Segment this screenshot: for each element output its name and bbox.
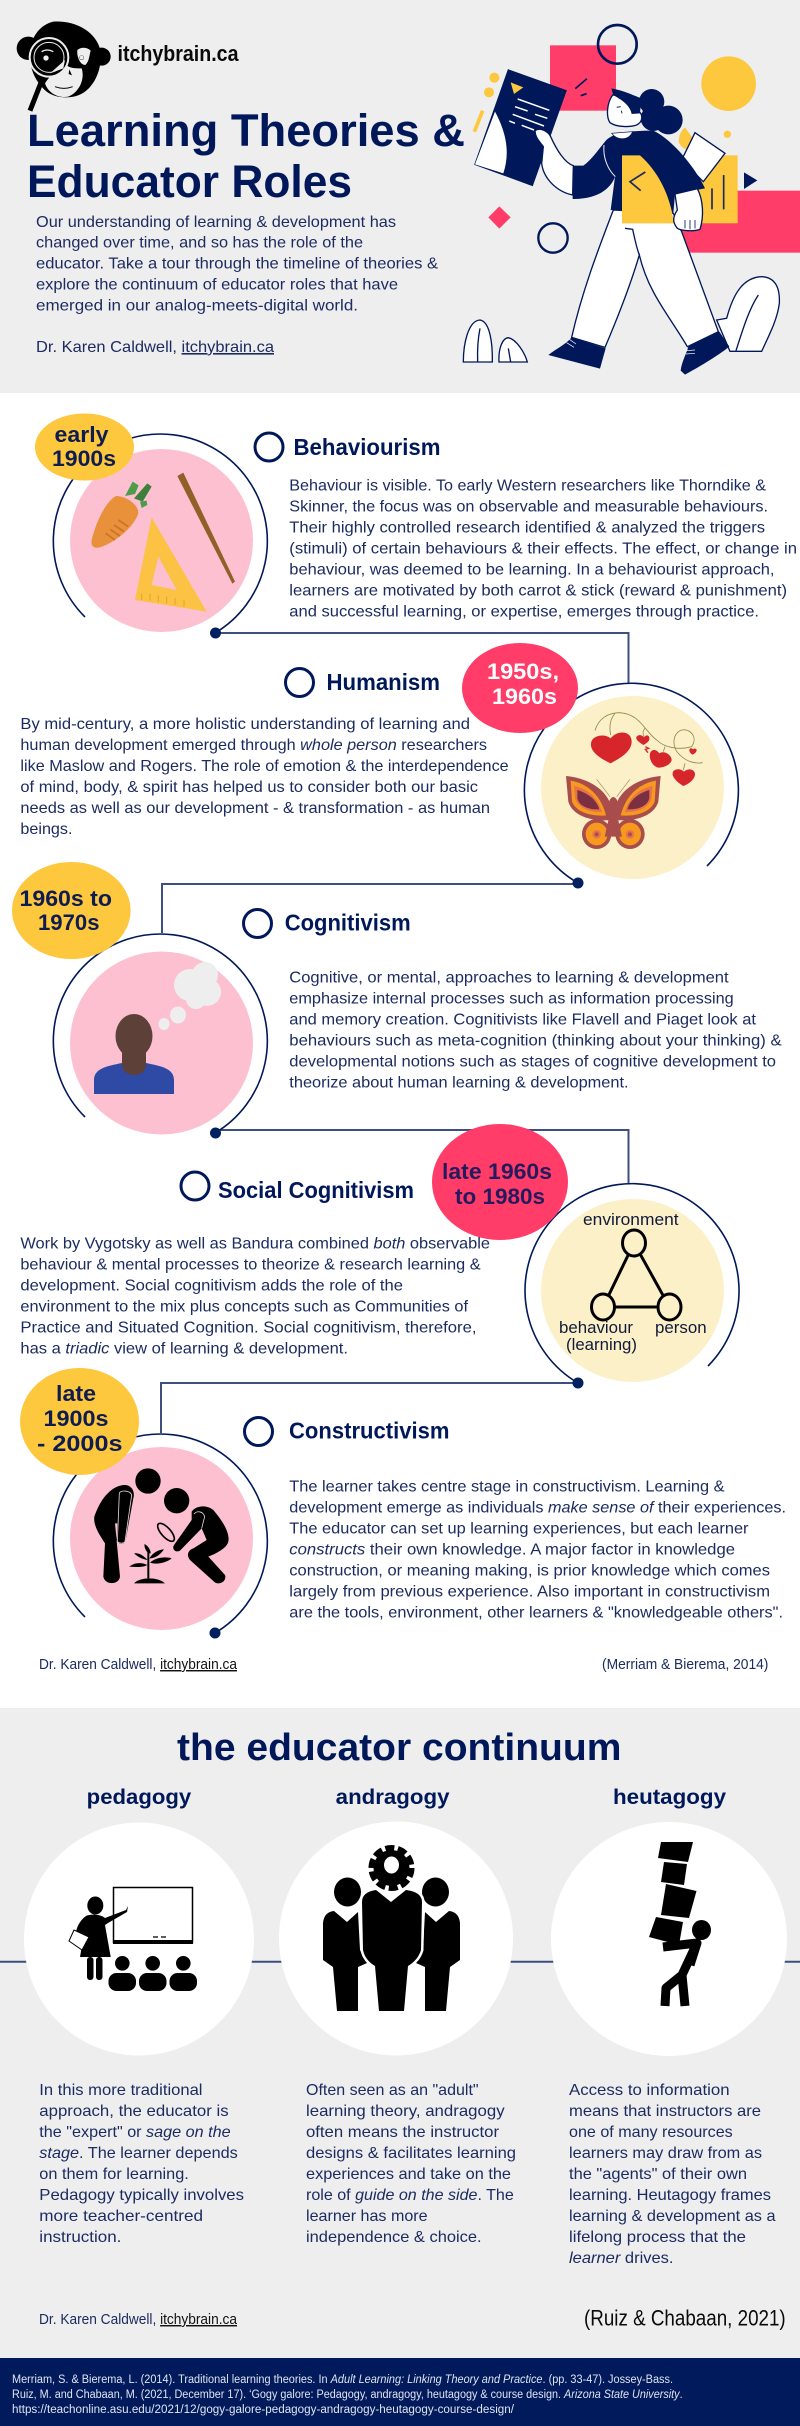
heading: Constructivism <box>289 1418 450 1444</box>
icon: teacher at board with students <box>69 1888 197 1991</box>
connector dot <box>210 628 221 638</box>
continuum line <box>0 1961 800 1963</box>
date badge: 1950s, 1960s: 1950s, <box>487 659 559 684</box>
body text <box>289 1479 786 1622</box>
date badge: early 1900s: 1900s <box>52 446 116 471</box>
panel: Cognitivism <box>12 862 782 1138</box>
body text: construction, or meaning making, is prior knowledge which comes <box>289 1563 770 1580</box>
body text: means that instructors are <box>569 2103 761 2120</box>
timeline connector lines <box>161 633 628 1433</box>
body text: role of guide on the side. The <box>306 2187 514 2204</box>
right plant <box>717 277 779 351</box>
panel: header <box>0 0 800 393</box>
panel: references footer: https://teachonline.asu.edu/2021/12/gogy-galore-pedagogy-andragogy-heutagogy-course-design/ <box>12 2404 515 2416</box>
credit line: continuum: Dr. Karen Caldwell, itchybrain.ca <box>39 2312 238 2328</box>
ring <box>525 1184 739 1383</box>
connector dot <box>210 1628 220 1638</box>
intro text block <box>36 214 438 314</box>
date badge: 1960s to 1970s <box>12 862 131 959</box>
face <box>607 88 642 127</box>
picture circle <box>70 449 253 632</box>
body text <box>306 2082 516 2246</box>
body text: Pedagogy typically involves <box>39 2187 244 2204</box>
heading: Behaviourism <box>294 434 440 460</box>
body text: more teacher-centred <box>39 2208 203 2225</box>
heading: pedagogy: pedagogy <box>87 1786 192 1809</box>
intro text block: educator. Take a tour through the timeline of theories & <box>36 256 438 272</box>
body text: and memory creation. Cognitivists like Flavell and Piaget look at <box>289 1012 757 1029</box>
body text: development. Social cognitivism adds the role of the <box>20 1278 403 1295</box>
body text: learning theory, andragogy <box>306 2103 505 2120</box>
picture circle <box>70 1447 253 1630</box>
white circle <box>24 1822 254 2056</box>
intro text block: explore the continuum of educator roles that have <box>36 276 398 294</box>
white circle <box>551 1822 787 2056</box>
illustration: woman walking with document <box>463 25 800 375</box>
column: heutagogy <box>551 1786 787 2267</box>
arm right <box>674 189 703 231</box>
icon: carrot, stick and set square <box>91 473 235 612</box>
icon: hearts and butterfly <box>566 713 703 849</box>
body text: theorize about human learning & development. <box>289 1075 629 1092</box>
white circle <box>279 1822 513 2056</box>
triadic diagram <box>559 1211 707 1354</box>
body text: one of many resources <box>569 2124 733 2141</box>
icon: monkey logo with magnifying glass <box>17 21 111 111</box>
title: Learning Theories & <box>27 105 465 156</box>
body text: learning & development as a <box>569 2208 776 2225</box>
arm left <box>535 129 573 195</box>
body text: developmental notions such as stages of cognitive development to <box>289 1054 776 1071</box>
body text: By mid-century, a more holistic understanding of learning and <box>20 716 470 733</box>
heading <box>286 668 440 696</box>
pants <box>572 210 718 347</box>
neck <box>612 132 633 139</box>
body text: beings. <box>20 821 72 838</box>
body text <box>20 716 509 838</box>
panel: references footer: Merriam, S. & Bierema, L. (2014). Traditional learning theories. In Adult Learning: Linking Theory and Practice. (pp. 33-47). Jossey-Bass. <box>12 2374 673 2386</box>
body text: Practice and Situated Cognition. Social cognitivism, therefore, <box>20 1320 477 1337</box>
connector dot <box>572 878 584 888</box>
connector dot <box>572 1378 584 1388</box>
hair bun <box>639 89 683 134</box>
body text: on them for learning. <box>39 2166 189 2183</box>
body text: development emerge as individuals make sense of their experiences. <box>289 1500 786 1517</box>
body text: often means the instructor <box>306 2124 500 2141</box>
body text: learners are motivated by both carrot & stick (reward & punishment) <box>289 583 787 600</box>
date badge: late 1900s - 2000s: - 2000s <box>37 1431 122 1456</box>
date badge: 1960s to 1970s: 1970s <box>38 910 100 935</box>
title: the educator continuum <box>177 1727 621 1769</box>
body text: emphasize internal processes such as information processing <box>289 991 734 1008</box>
picture circle <box>70 952 253 1134</box>
credit line: continuum <box>39 2306 786 2331</box>
triadic diagram: behaviour <box>559 1319 634 1337</box>
ring <box>53 1434 267 1633</box>
title <box>27 105 465 207</box>
triadic diagram: environment <box>583 1211 679 1229</box>
panel: Humanism <box>20 643 738 888</box>
body text: environment to the mix plus concepts such as Communities of <box>20 1299 469 1316</box>
body text: and successful learning, or expertise, emerges through practice. <box>289 604 759 621</box>
date badge: 1960s to 1970s: 1960s to <box>20 886 112 911</box>
shoes <box>548 337 606 369</box>
date badge: 1950s, 1960s <box>462 643 578 733</box>
body text: stage. The learner depends <box>39 2145 238 2162</box>
icon: person thinking with thought cloud <box>94 962 221 1094</box>
date badge: late 1900s - 2000s <box>20 1368 139 1475</box>
picture circle <box>541 696 724 879</box>
body text: constructs their own knowledge. A major factor in knowledge <box>289 1542 735 1559</box>
body text: has a triadic view of learning & development. <box>20 1341 348 1358</box>
heading: Social Cognitivism <box>218 1177 414 1203</box>
credit line: timeline <box>39 1657 768 1673</box>
body text <box>569 2082 776 2267</box>
date badge: late 1960s to 1980s: to 1980s <box>455 1184 545 1209</box>
butterfly <box>566 776 661 849</box>
date badge: early 1900s <box>35 414 134 480</box>
title: Educator Roles <box>27 156 352 207</box>
body text: learner drives. <box>569 2250 674 2267</box>
heading <box>181 1172 414 1203</box>
body text: behaviours such as meta-cognition (thinking about your thinking) & <box>289 1033 782 1050</box>
triadic diagram: (learning) <box>566 1336 637 1354</box>
icon: three people and gear <box>323 1848 460 2011</box>
icon: two people inspecting a seedling <box>94 1468 229 1583</box>
body text: like Maslow and Rogers. The role of emotion & the interdependence <box>20 758 509 775</box>
intro text block: emerged in our analog-meets-digital world. <box>36 298 358 314</box>
body text: The learner takes centre stage in constructivism. Learning & <box>289 1479 725 1496</box>
ring <box>53 934 267 1133</box>
left plants <box>463 320 492 362</box>
date badge: late 1960s to 1980s <box>432 1124 568 1240</box>
body text: Behaviour is visible. To early Western researchers like Thorndike & <box>289 478 766 495</box>
front yellow panel <box>622 155 674 223</box>
body text: human development emerged through whole person researchers <box>20 737 487 754</box>
date badge: 1950s, 1960s: 1960s <box>492 684 557 709</box>
intro text block: Our understanding of learning & development has <box>36 214 396 231</box>
panel: the educator continuum <box>0 1708 800 2358</box>
body text: of mind, body, & spirit has helped us to consider both our basic <box>20 779 478 796</box>
body text: independence & choice. <box>306 2229 482 2246</box>
credit line: timeline: (Merriam & Bierema, 2014) <box>602 1657 768 1673</box>
body text: Their highly controlled research identified & analyzed the triggers <box>289 520 765 537</box>
body text <box>39 2082 244 2246</box>
body text: Cognitive, or mental, approaches to learning & development <box>289 970 729 987</box>
body text: Access to information <box>569 2082 730 2099</box>
date badge: late 1900s - 2000s: 1900s <box>44 1406 108 1431</box>
date badge: early 1900s: early <box>54 422 109 447</box>
body text: experiences and take on the <box>306 2166 511 2183</box>
heading <box>244 910 411 938</box>
heading: andragogy: andragogy <box>336 1786 450 1809</box>
icon: person carrying stacked boxes <box>649 1842 711 2006</box>
document <box>475 70 566 185</box>
body text: are the tools, environment, other learners & "knowledgeable others". <box>289 1605 783 1622</box>
ring <box>524 683 738 883</box>
body text: The educator can set up learning experiences, but each learner <box>289 1521 749 1538</box>
ring <box>53 434 267 633</box>
panel: references footer <box>0 2358 800 2426</box>
body text: approach, the educator is <box>39 2103 229 2120</box>
panel: references footer: Ruiz, M. and Chabaan, M. (2021, December 17). ‘Gogy galore: Pedagogy, andragogy, heutagogy & course design. Arizona State University. <box>12 2389 683 2401</box>
panel: Behaviourism <box>35 414 797 638</box>
body text <box>289 970 782 1092</box>
connector dot <box>210 1128 221 1138</box>
body text: learner has more <box>306 2208 428 2225</box>
body text <box>289 478 797 621</box>
panel: Social Cognitivism <box>20 1124 739 1388</box>
credit line: timeline: Dr. Karen Caldwell, itchybrain.ca <box>39 1657 238 1673</box>
body text: In this more traditional <box>39 2082 203 2099</box>
body text: learners may draw from as <box>569 2145 762 2162</box>
logo text: itchybrain.ca <box>118 41 239 66</box>
column: andragogy <box>279 1786 516 2246</box>
date badge: late 1960s to 1980s: late 1960s <box>442 1159 552 1184</box>
body text <box>20 1236 490 1358</box>
heading: Cognitivism <box>285 910 411 936</box>
heading: heutagogy: heutagogy <box>613 1786 726 1809</box>
body text: learning. Heutagogy frames <box>569 2187 771 2204</box>
body text: (stimuli) of certain behaviours & their effects. The effect, or change in <box>289 541 797 558</box>
body text: lifelong process that the <box>569 2229 746 2246</box>
shirt <box>573 131 705 213</box>
intro text block: changed over time, and so has the role of the <box>36 234 363 252</box>
date badge: late 1900s - 2000s: late <box>56 1381 96 1406</box>
body text: Skinner, the focus was on observable and measurable behaviours. <box>289 499 768 516</box>
body text: behaviour, was deemed to be learning. In a behaviourist approach, <box>289 562 774 579</box>
body text: instruction. <box>39 2229 121 2246</box>
body text: the "expert" or sage on the <box>39 2124 231 2141</box>
body text: needs as well as our development - & transformation - as human <box>20 800 490 817</box>
column: pedagogy <box>24 1786 254 2246</box>
body text: behaviour & mental processes to theorize & research learning & <box>20 1257 481 1274</box>
heading: Humanism <box>326 669 440 695</box>
picture circle <box>541 1199 724 1382</box>
body text: Often seen as an "adult" <box>306 2082 479 2099</box>
body text: the "agents" of their own <box>569 2166 747 2183</box>
author credit: Dr. Karen Caldwell, itchybrain.ca <box>36 339 274 356</box>
body text: Work by Vygotsky as well as Bandura combined both observable <box>20 1236 490 1253</box>
body text: designs & facilitates learning <box>306 2145 516 2162</box>
body text: largely from previous experience. Also important in constructivism <box>289 1584 770 1601</box>
panel: Constructivism <box>20 1368 786 1638</box>
triadic diagram: person <box>655 1319 707 1337</box>
